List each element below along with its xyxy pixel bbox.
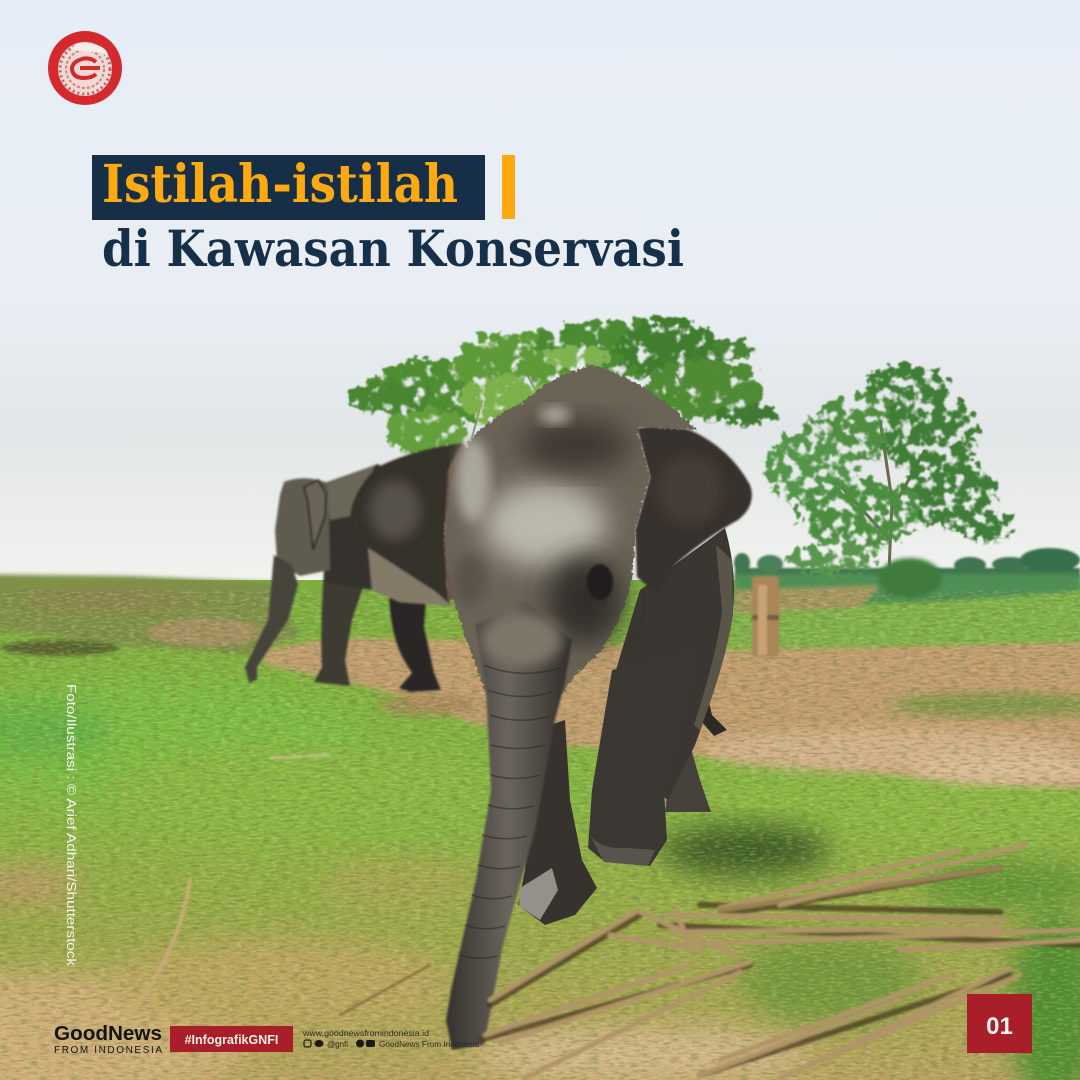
right tree xyxy=(765,365,1013,598)
page number badge: 01 xyxy=(986,1013,1013,1040)
sky background xyxy=(0,0,1080,600)
title line 2: di Kawasan Konservasi xyxy=(102,219,684,278)
thin dry stick xyxy=(130,880,190,1015)
right grass band xyxy=(735,590,1080,648)
page number badge xyxy=(967,994,1032,1053)
footer links xyxy=(302,1028,479,1049)
logo xyxy=(48,31,122,105)
icon: facebook xyxy=(356,1040,364,1048)
baby right ear xyxy=(635,426,752,594)
adult elephant belly xyxy=(368,548,452,606)
adult elephant neck band xyxy=(444,442,472,600)
soil path behind elephants xyxy=(265,638,1080,790)
dry brush left xyxy=(0,574,300,655)
baby tail xyxy=(702,690,727,736)
baby body xyxy=(610,528,734,800)
baby left leg xyxy=(518,720,597,925)
trunk wrinkles xyxy=(460,665,560,958)
baby head shading xyxy=(454,406,630,644)
big tree xyxy=(348,320,775,454)
adult elephant small ear xyxy=(304,480,326,550)
adult elephant back leg xyxy=(389,598,441,692)
lower tan soil xyxy=(0,975,250,1080)
adult elephant torso xyxy=(322,464,450,604)
adult elephant front leg xyxy=(314,572,374,686)
grass shadow and lush area xyxy=(660,824,830,876)
grass texture xyxy=(0,590,1080,1080)
adult elephant head xyxy=(275,478,330,576)
footer links: @gnfi xyxy=(327,1040,348,1049)
bamboo sticks xyxy=(130,755,1080,1078)
title line 1: Istilah-istilah xyxy=(102,154,458,215)
right grass tuft on soil xyxy=(890,693,1080,717)
baby trunk xyxy=(446,600,572,1050)
baby front leg xyxy=(588,650,700,866)
bright grass right xyxy=(650,778,1080,842)
dry brush right xyxy=(735,585,880,615)
tree trunk xyxy=(835,420,925,595)
adult elephant trunk xyxy=(245,555,298,683)
footer brand: FROM INDONESIA xyxy=(54,1045,162,1056)
footer links: www.goodnewsfromindonesia.id xyxy=(302,1028,429,1038)
hashtag badge xyxy=(170,1026,293,1052)
tree foliage xyxy=(765,365,1013,578)
stick shadows xyxy=(480,868,1080,1075)
tree stump post xyxy=(752,576,779,657)
bright grass left xyxy=(0,680,370,800)
stick highlights xyxy=(485,845,1080,1078)
adult elephant large ear xyxy=(350,443,462,600)
hashtag badge: #InfografikGNFI xyxy=(185,1033,278,1047)
tree branches xyxy=(470,345,690,445)
title highlight box xyxy=(92,155,485,220)
icon: instagram xyxy=(304,1040,311,1047)
icon: twitter xyxy=(314,1040,324,1047)
title accent bar xyxy=(502,155,515,219)
grass field xyxy=(0,580,1080,1080)
baby eye xyxy=(587,564,613,600)
icon: youtube xyxy=(366,1040,375,1047)
adult elephant neck xyxy=(325,465,375,520)
footer brand xyxy=(54,1023,162,1056)
ground xyxy=(0,574,1080,1080)
photo credit: Foto/Ilustrasi : © Arief Adhari/Shutterstock xyxy=(64,684,79,967)
baby elephant xyxy=(444,365,752,1050)
footer brand: GoodNews xyxy=(54,1023,162,1045)
footer links: GoodNews From Indonesia xyxy=(379,1039,479,1049)
baby rear leg xyxy=(665,745,711,812)
distant tree line xyxy=(734,548,1080,580)
tree foliage xyxy=(348,320,775,454)
adult elephant xyxy=(245,442,472,692)
far green field xyxy=(735,574,1080,604)
baby head xyxy=(444,365,697,705)
